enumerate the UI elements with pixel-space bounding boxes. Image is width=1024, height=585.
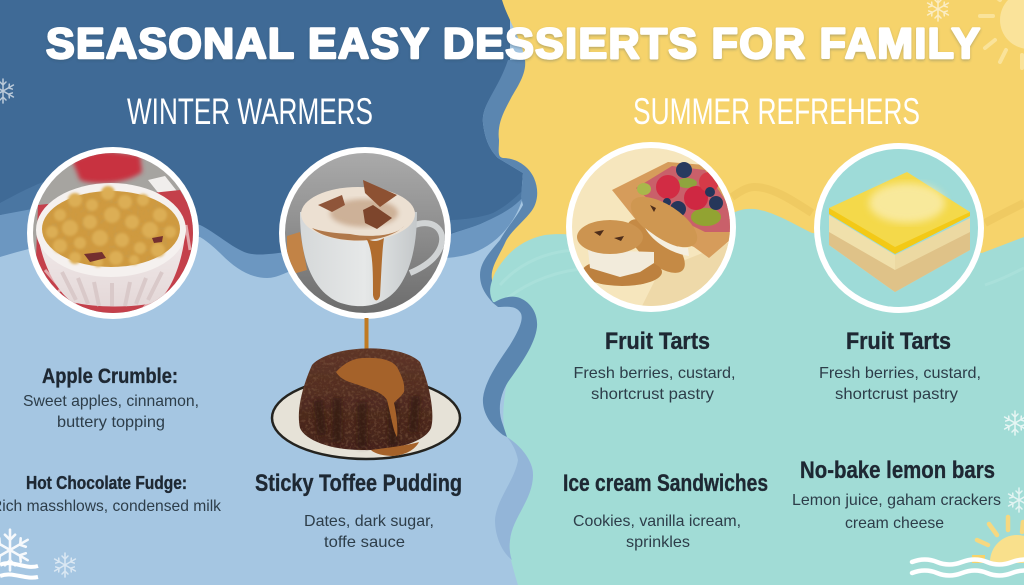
description line 2: cream cheese [845, 515, 944, 532]
teal wave highlights [500, 250, 1024, 300]
panel: winter dark blue [0, 0, 523, 255]
powdered sugar [869, 183, 945, 223]
name: Fruit Tarts [846, 328, 951, 355]
waves [912, 560, 1024, 576]
text: apple crumble [23, 365, 199, 431]
pudding cake [299, 348, 432, 450]
red tablecloth [35, 190, 200, 318]
title: SEASONAL EASY DESSIERTS FOR FAMILY [46, 20, 980, 68]
description line 2: sprinkles [626, 534, 690, 551]
background [33, 153, 193, 313]
description line 2: shortcrust pastry [591, 386, 714, 403]
sun [990, 535, 1024, 585]
chocolate chips [594, 205, 656, 241]
name: Ice cream Sandwiches [563, 470, 768, 497]
tilted filling [645, 228, 689, 256]
table shading [642, 242, 728, 306]
panel: summer teal [490, 209, 1024, 585]
fruit spots [84, 236, 163, 262]
lower tilted cookie [628, 219, 685, 273]
photo: sticky toffee pudding [272, 348, 460, 459]
winter dark wave shading [0, 182, 523, 236]
icon: sun top right [980, 0, 1024, 68]
photo: hot chocolate fudge [279, 147, 451, 319]
name: Sticky Toffee Pudding [255, 470, 462, 497]
description line 2: buttery topping [57, 414, 165, 431]
wave backing [985, 563, 1024, 585]
icon: snow drift with snowflake [0, 530, 38, 578]
cloth checks [45, 225, 190, 312]
upper tilted cookie [631, 197, 697, 248]
foam [301, 187, 415, 241]
pudding ridges [318, 396, 416, 448]
bowl flutes [62, 272, 162, 306]
description: Lemon juice, gaham crackers [792, 492, 1001, 509]
fudge pieces [363, 180, 397, 207]
large snowflake [0, 530, 28, 570]
name: No-bake lemon bars [800, 457, 995, 484]
text: ice cream sandwiches [563, 470, 768, 551]
tart filling [636, 166, 732, 232]
white ring [279, 147, 451, 319]
winter mid-blue wave band [0, 185, 530, 278]
bar base right [895, 218, 970, 292]
icon: snowflake right lower [1009, 488, 1024, 512]
white ring [566, 142, 736, 312]
sun base [972, 555, 985, 563]
panel: summer yellow [492, 0, 1024, 300]
icon: snowflake top [928, 0, 948, 21]
stacked sandwich bottom cookie [584, 264, 662, 286]
gray background [285, 153, 445, 313]
red cloth top [72, 150, 142, 183]
text: hot chocolate fudge [0, 473, 222, 515]
yellow wave shading [732, 187, 1024, 223]
crumble lumps [46, 186, 176, 267]
sun rays [977, 517, 1023, 545]
cocoa rim [312, 226, 404, 240]
lemon top [829, 172, 970, 247]
icon: snowflake left [0, 79, 13, 103]
shortbread shading [829, 232, 970, 292]
description line 2: toffe sauce [324, 534, 405, 551]
mug handle [410, 223, 442, 273]
teal background [820, 149, 978, 307]
description: Fresh berries, custard, [574, 365, 736, 382]
name: Apple Crumble: [42, 365, 178, 388]
tart pastry [612, 162, 735, 258]
description: Cookies, vanilla icream, [573, 513, 741, 530]
white ring [814, 143, 984, 313]
center lower ribbon [483, 297, 537, 437]
plate [272, 377, 460, 459]
text: fruit tarts right [819, 328, 981, 403]
center pale ribbon [495, 437, 533, 560]
text: no-bake lemon bars [792, 457, 1001, 532]
description: Dates, dark sugar, [304, 513, 434, 530]
photo: lemon bar [814, 143, 984, 313]
toffee sauce [336, 358, 404, 437]
bowl body [38, 235, 185, 306]
crumble topping [42, 191, 180, 267]
name: Fruit Tarts [605, 328, 710, 355]
photo: apple crumble [27, 147, 200, 319]
bar base left [829, 215, 895, 292]
cream background [572, 148, 730, 306]
bowl rim [36, 183, 186, 277]
ice cream filling [588, 250, 654, 277]
description line 2: shortcrust pastry [835, 386, 958, 403]
lemon side [829, 208, 970, 254]
text: sticky toffee pudding [255, 470, 462, 551]
photo: fruit tart and ice cream sandwiches [566, 142, 736, 312]
cocoa speckle [330, 199, 398, 227]
description: Sweet apples, cinnamon, [23, 393, 199, 410]
kiwi [691, 208, 721, 226]
description: Fresh berries, custard, [819, 365, 981, 382]
name: Hot Chocolate Fudge: [26, 473, 187, 493]
mug body [300, 212, 417, 306]
icon: snowflake bottom [55, 553, 75, 577]
icon: sun and waves bottom right [912, 517, 1024, 585]
panel: winter light blue [0, 0, 560, 585]
icon: snowflake right [1005, 411, 1024, 435]
raspberries [656, 175, 680, 199]
caramel drip [366, 238, 384, 300]
caramel stream [364, 318, 368, 358]
heading: winter warmers: WINTER WARMERS [127, 91, 373, 132]
heading: summer refreshers: SUMMER REFREHERS [633, 91, 920, 132]
drift [0, 563, 38, 578]
white ring [27, 147, 199, 319]
white towel [148, 176, 176, 192]
sauce pool [371, 442, 419, 456]
blueberries [676, 162, 692, 178]
winter mid ribbon [480, 60, 545, 303]
stacked sandwich top cookie [577, 220, 643, 254]
text: fruit tarts left [574, 328, 736, 403]
caramel cubes [287, 232, 307, 274]
